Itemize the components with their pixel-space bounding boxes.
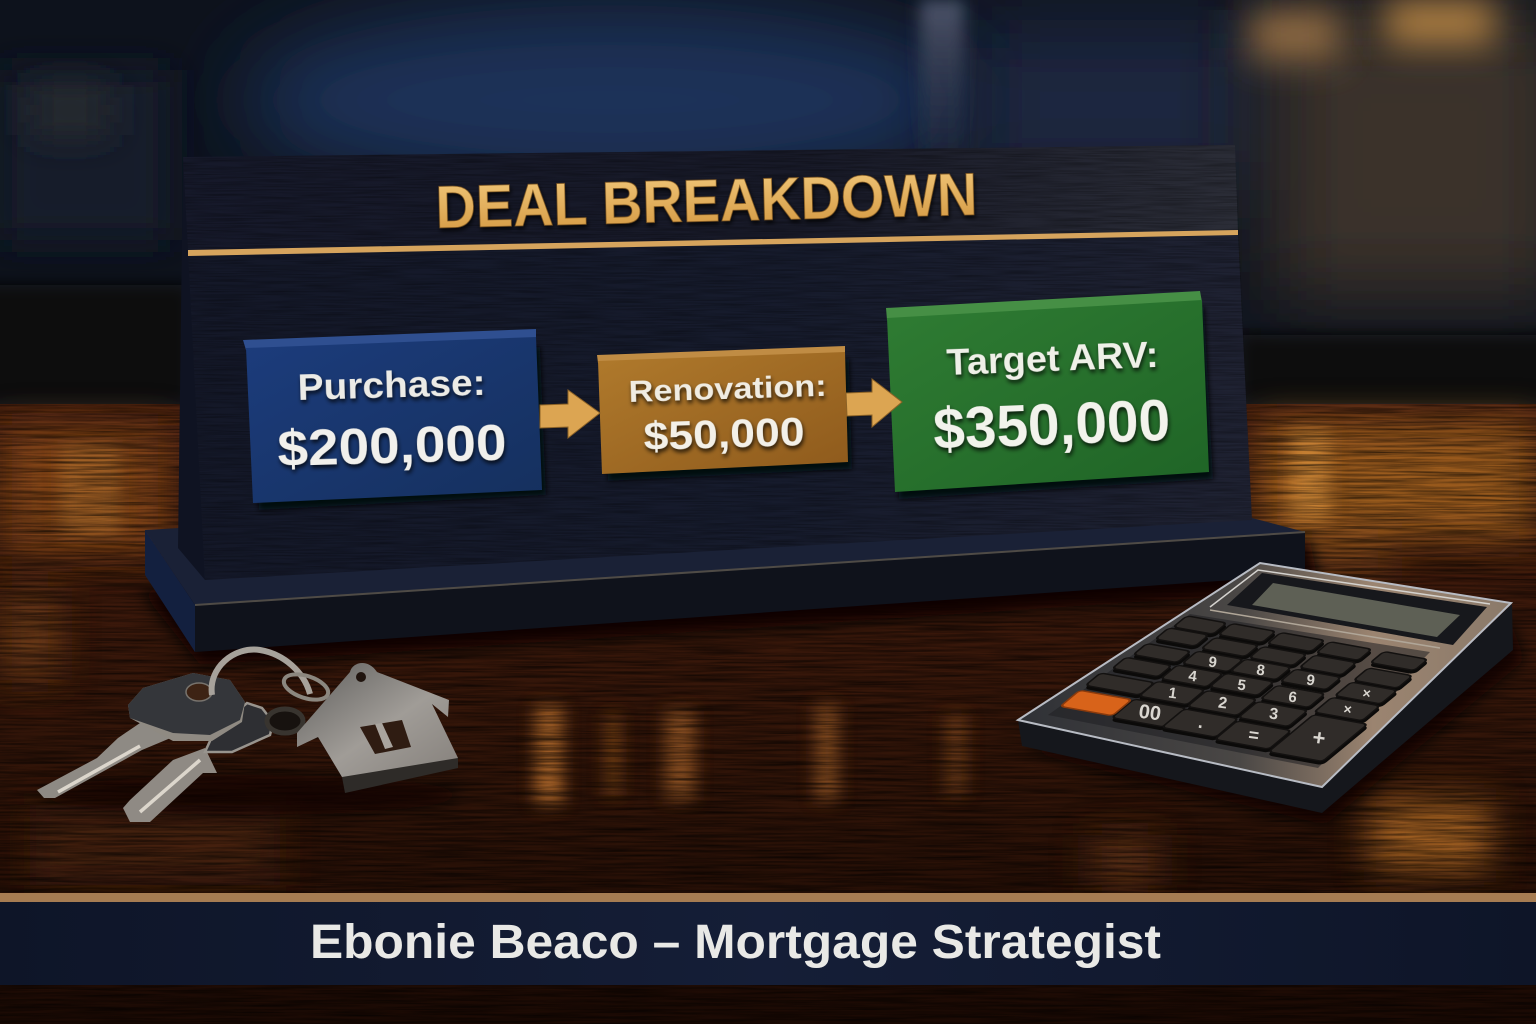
key labels: 4 (1187, 668, 1199, 686)
label: Target ARV: (946, 334, 1159, 383)
key labels: + (1311, 724, 1327, 751)
key labels: 5 (1236, 677, 1247, 695)
icon: calculator (1018, 563, 1525, 825)
blurred office background (0, 0, 1536, 420)
key labels: 1 (1167, 685, 1178, 703)
key labels: = (1247, 724, 1260, 746)
icon: house keychain and keys (37, 650, 460, 822)
panel face (188, 234, 1252, 580)
header strip (183, 145, 1238, 250)
house tag (297, 663, 458, 793)
key labels: . (1197, 712, 1205, 732)
key labels: 2 (1217, 695, 1228, 713)
gold rule (0, 893, 1536, 902)
shadow (40, 775, 460, 815)
shadow (1020, 620, 1525, 825)
side wing (178, 157, 205, 580)
key labels: × (1362, 685, 1372, 702)
value: $50,000 (643, 410, 805, 459)
screen bezel (1227, 573, 1487, 645)
brushed texture (180, 140, 1260, 585)
key labels: 3 (1268, 706, 1279, 724)
step: renovation (597, 346, 852, 481)
key ring (212, 650, 310, 695)
display stand (140, 140, 1320, 665)
heading: DEAL BREAKDOWN (435, 161, 978, 241)
back key (123, 703, 273, 822)
base (145, 518, 1305, 652)
key labels: × (1343, 701, 1353, 718)
key labels: 9 (1305, 672, 1316, 690)
banner bar (0, 902, 1536, 985)
wooden table (0, 404, 1536, 1024)
shadow (140, 540, 1320, 665)
key labels: 9 (1207, 654, 1218, 672)
footer banner (0, 893, 1536, 985)
label: Purchase: (297, 362, 486, 408)
arrow: purchase to renovation (540, 390, 600, 438)
gold rule (188, 230, 1238, 256)
screen (1252, 583, 1460, 637)
step: purchase (243, 329, 546, 510)
body top (1018, 563, 1511, 787)
key labels: 00 (1137, 701, 1162, 725)
orange key (1060, 690, 1132, 716)
keypad well (1048, 614, 1430, 768)
arrow: renovation to target (846, 379, 902, 427)
key labels: 6 (1287, 689, 1298, 707)
key labels (1137, 654, 1372, 751)
body side (1018, 604, 1513, 813)
key labels: 8 (1255, 662, 1266, 680)
value: $350,000 (932, 388, 1171, 462)
keys (1086, 616, 1428, 761)
label: Renovation: (628, 368, 827, 409)
footer text: Ebonie Beaco – Mortgage Strategist (310, 916, 1161, 969)
step: target ARV (886, 291, 1213, 499)
value: $200,000 (277, 414, 507, 477)
front key (37, 673, 245, 798)
